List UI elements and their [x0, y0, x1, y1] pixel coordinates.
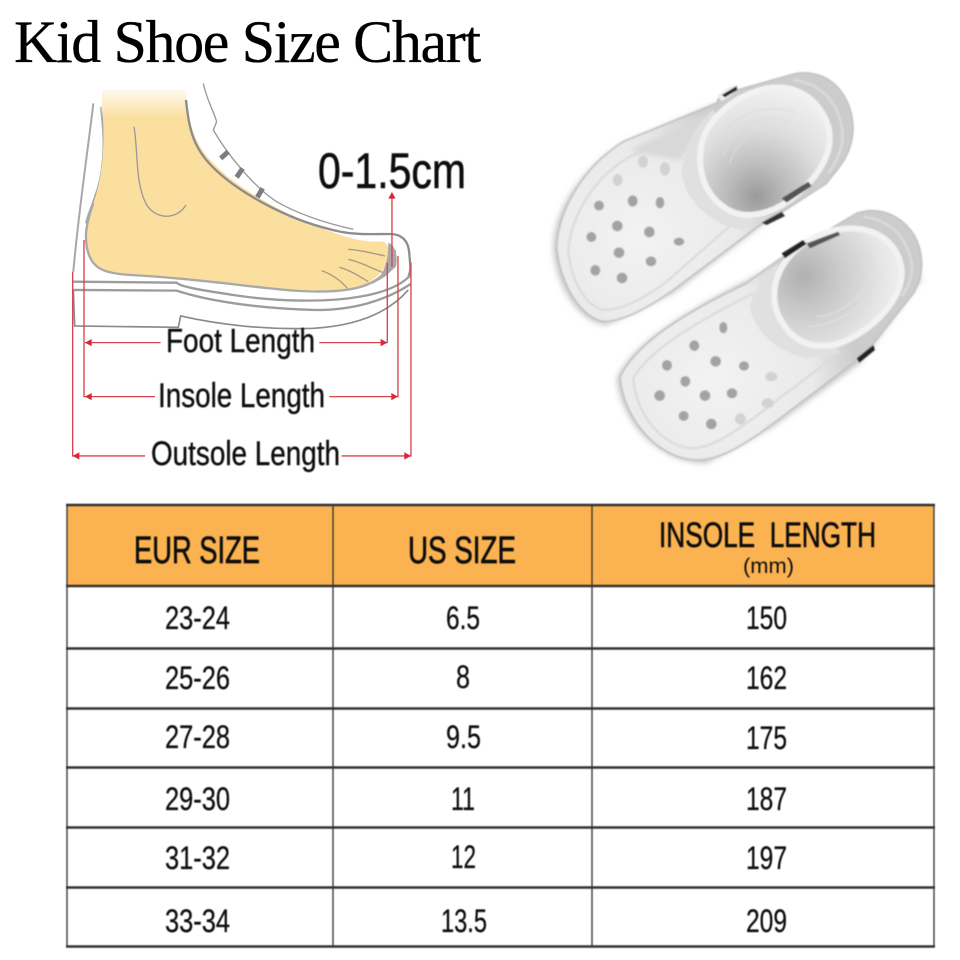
row 3: 9.5 — [446, 719, 481, 755]
row 6: 33-34 — [165, 903, 230, 939]
shoe back inner band — [86, 107, 104, 223]
clog: upper left — [557, 73, 853, 322]
label: insole length: Insole Length — [158, 377, 325, 415]
header: EUR size: EUR SIZE — [134, 530, 260, 572]
clog: lower right — [620, 211, 922, 460]
row 5: 197 — [746, 840, 787, 876]
foot underside outline — [86, 203, 395, 292]
label: foot length: Foot Length — [166, 322, 315, 359]
insole ridges — [717, 109, 797, 163]
shadow — [553, 103, 923, 463]
holes — [586, 156, 684, 283]
ankle fade — [97, 83, 192, 118]
row 6: 13.5 — [441, 903, 487, 939]
opening — [774, 228, 902, 346]
foot — [86, 90, 389, 292]
row 2 — [165, 659, 787, 696]
collar with texture — [750, 263, 840, 358]
row 4: 11 — [451, 781, 475, 817]
row 6 — [165, 903, 787, 939]
row 4: 29-30 — [165, 781, 230, 817]
toe rim — [633, 293, 830, 448]
clogs photo — [553, 73, 923, 463]
foot and shoe drawing — [73, 83, 411, 329]
row 1 — [165, 600, 787, 636]
row 4: 187 — [746, 781, 787, 817]
row 3: 175 — [746, 720, 787, 756]
heel strap lines — [863, 217, 912, 297]
header: insole length: INSOLE LENGTH — [659, 516, 876, 555]
upper shading — [630, 110, 713, 160]
header band — [67, 505, 934, 586]
row 2: 8 — [456, 659, 470, 695]
header: mm unit: (mm) — [743, 555, 794, 578]
shoe upper back — [73, 103, 93, 272]
row 6: 209 — [746, 903, 787, 939]
row 5 — [165, 839, 787, 876]
row 1: 6.5 — [446, 600, 480, 636]
heel strap lines — [793, 80, 843, 173]
size table — [66, 505, 935, 947]
body — [620, 211, 922, 460]
header: US size: US SIZE — [408, 530, 516, 572]
row 3 — [165, 719, 787, 756]
shoe front outline — [186, 100, 410, 277]
holes — [654, 322, 777, 429]
collar with texture — [682, 110, 773, 230]
body — [557, 73, 853, 322]
shoe tongue and laces — [203, 83, 353, 229]
label: 0-1.5cm: 0-1.5cm — [318, 143, 466, 199]
title: Kid Shoe Size Chart — [14, 9, 481, 75]
row 2: 25-26 — [165, 660, 230, 696]
red measurement lines — [73, 192, 411, 460]
label: outsole length: Outsole Length — [151, 435, 340, 473]
foot measurement diagram — [73, 83, 466, 473]
row 3: 27-28 — [165, 719, 230, 755]
row 1: 150 — [746, 600, 787, 636]
rivets — [782, 240, 807, 258]
rivets — [718, 85, 738, 101]
row 2: 162 — [746, 660, 787, 696]
opening — [700, 87, 830, 215]
row 4 — [165, 781, 787, 817]
ankle bone line — [134, 127, 186, 216]
row 1: 23-24 — [165, 600, 230, 636]
row 5: 31-32 — [165, 840, 230, 876]
toes — [322, 249, 385, 288]
insole ridges — [807, 267, 883, 327]
row 5: 12 — [451, 839, 476, 875]
toe rim — [568, 125, 737, 310]
sole — [73, 275, 411, 301]
table grid — [66, 505, 935, 947]
